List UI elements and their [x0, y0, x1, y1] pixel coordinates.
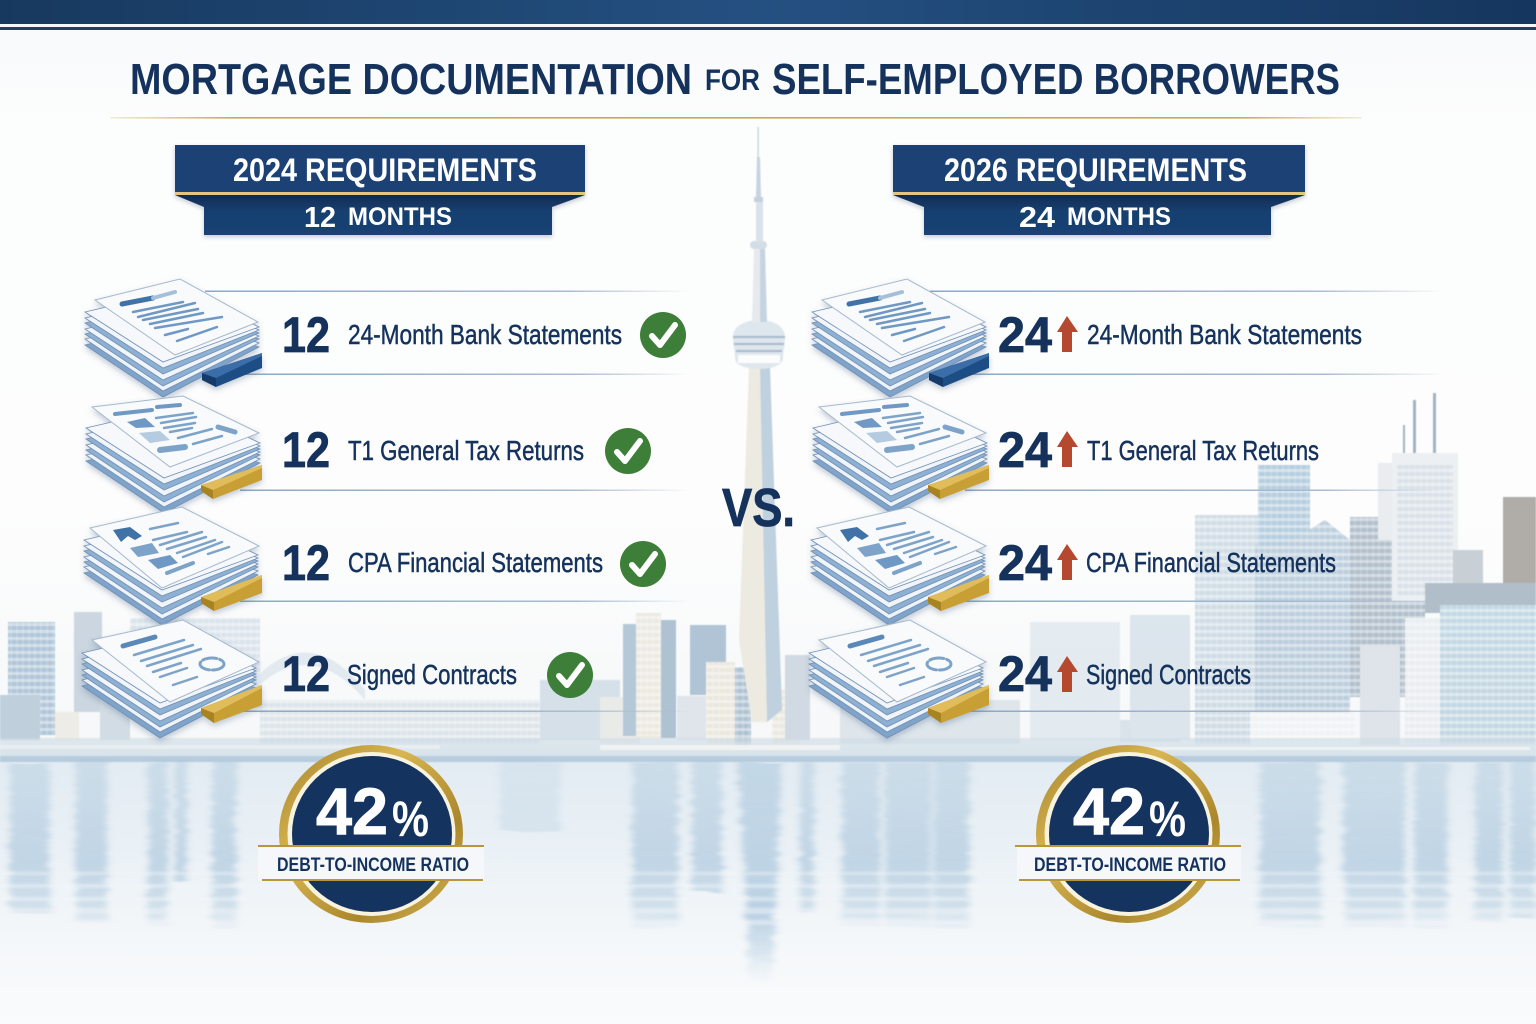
row: bank statements 2026: 24 — [998, 307, 1052, 363]
title underline — [110, 117, 1362, 119]
row: tax returns 2024: T1 General Tax Returns — [348, 435, 584, 466]
banner: 2024 requirements: 12 — [304, 202, 336, 234]
row: signed contracts 2026: 24 — [998, 646, 1052, 702]
water reflection of skyline — [0, 762, 1536, 982]
row: signed contracts 2024: 12 — [282, 646, 330, 702]
row: signed contracts 2024 — [82, 620, 593, 738]
badge: 2026 debt-to-income — [1015, 745, 1241, 923]
row: financial statements 2024: 12 — [282, 535, 330, 591]
row: financial statements 2026: CPA Financial Statements — [1086, 547, 1336, 578]
row: tax returns 2026 — [813, 396, 1319, 513]
badge: 2024 debt-to-income: % — [392, 791, 429, 847]
row: bank statements 2024: 24-Month Bank Statements — [348, 319, 622, 350]
VS label: VS. — [722, 478, 795, 538]
banner: 2024 requirements: 2024 REQUIREMENTS — [233, 152, 537, 188]
banner: 2026 requirements — [893, 145, 1305, 235]
row: bank statements 2024 — [85, 279, 686, 397]
badge: 2026 debt-to-income: 42 — [1073, 774, 1145, 848]
top band — [0, 0, 1536, 30]
row: financial statements 2024 — [84, 507, 666, 625]
banner: 2024 requirements: MONTHS — [348, 203, 452, 231]
row: tax returns 2026: T1 General Tax Returns — [1087, 435, 1319, 466]
row: signed contracts 2026 — [809, 620, 1251, 738]
banner: 2026 requirements: 24 — [1019, 202, 1055, 234]
title: FOR — [705, 64, 760, 97]
row: tax returns 2024 — [86, 396, 651, 513]
row: financial statements 2024: CPA Financial Statements — [348, 547, 603, 578]
banner: 2024 requirements — [175, 145, 585, 235]
row separators right — [930, 290, 1445, 712]
CN Tower — [733, 127, 785, 722]
banner: 2026 requirements: 2026 REQUIREMENTS — [944, 152, 1247, 188]
badge: 2024 debt-to-income: 42 — [316, 774, 388, 848]
title — [130, 55, 1340, 104]
row: signed contracts 2024: Signed Contracts — [347, 659, 517, 690]
skyline — [0, 393, 1536, 762]
badge: 2026 debt-to-income: % — [1149, 791, 1186, 847]
row: financial statements 2026: 24 — [998, 535, 1052, 591]
panel: 2026 rows — [809, 279, 1362, 738]
panel: 2024 rows — [82, 279, 686, 738]
banner: 2026 requirements: MONTHS — [1067, 203, 1171, 231]
row: signed contracts 2026: Signed Contracts — [1086, 659, 1251, 690]
row: tax returns 2024: 12 — [282, 422, 330, 478]
title: MORTGAGE DOCUMENTATION — [130, 55, 692, 104]
row separators left — [205, 290, 690, 712]
row: bank statements 2024: 12 — [282, 307, 330, 363]
row: bank statements 2026 — [812, 279, 1362, 397]
badge: 2024 debt-to-income — [258, 745, 484, 923]
badge: 2026 debt-to-income: DEBT-TO-INCOME RATIO — [1034, 855, 1226, 876]
row: financial statements 2026 — [811, 507, 1336, 625]
title: SELF-EMPLOYED BORROWERS — [772, 55, 1340, 104]
row: bank statements 2026: 24-Month Bank Statements — [1087, 319, 1362, 350]
badge: 2024 debt-to-income: DEBT-TO-INCOME RATIO — [277, 855, 469, 876]
row: tax returns 2026: 24 — [998, 422, 1052, 478]
